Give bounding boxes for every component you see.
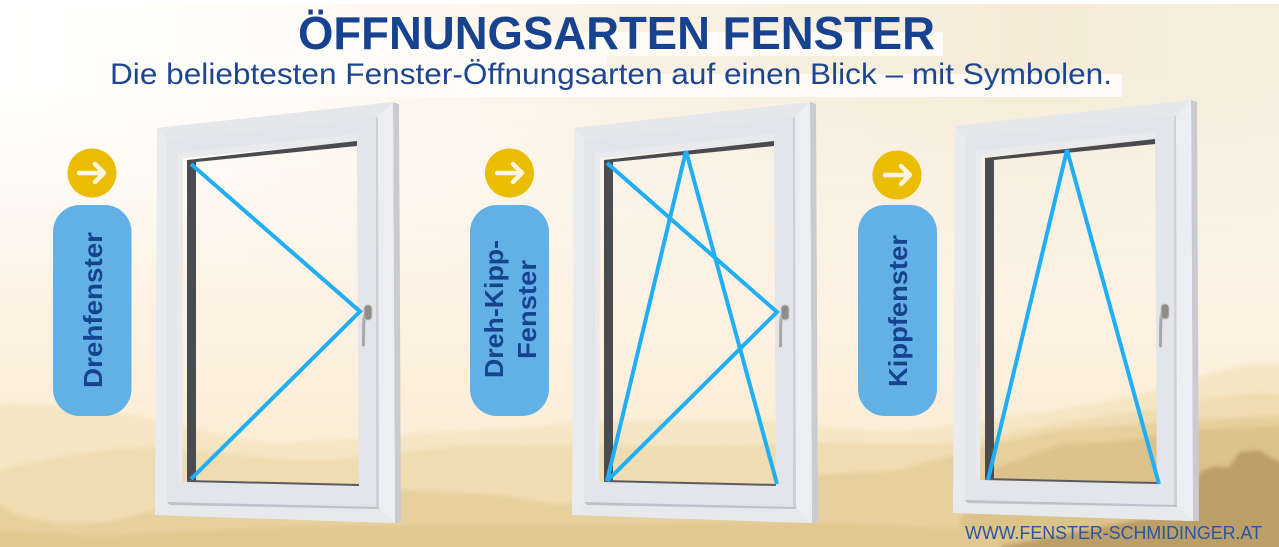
icon: window handle — [1160, 304, 1169, 346]
window photo — [572, 102, 818, 523]
panel: Dreh-Kipp-Fenster — [470, 102, 818, 523]
label pill — [470, 205, 549, 416]
label pill: Fenster — [512, 260, 542, 359]
icon: arrow badge — [68, 148, 116, 198]
panel: Drehfenster — [53, 102, 401, 523]
title: ÖFFNUNGSARTEN FENSTER — [298, 7, 935, 59]
hill layer near — [0, 415, 1279, 547]
website url: WWW.FENSTER-SCHMIDINGER.AT — [965, 523, 1262, 543]
label pill — [53, 205, 132, 416]
subtitle: Die beliebtesten Fenster-Öffnungsarten auf einen Blick – mit Symbolen. — [110, 58, 1112, 91]
label pill: Kippfenster — [883, 235, 913, 387]
ground band — [0, 522, 1000, 547]
window photo — [155, 102, 401, 523]
opening symbol lines — [988, 150, 1159, 484]
opening symbol lines — [607, 151, 777, 484]
title highlight bars — [107, 32, 1122, 97]
icon: arrow badge — [485, 148, 534, 198]
hill layer far — [0, 363, 1279, 547]
label pill: Dreh-Kipp- — [479, 240, 509, 378]
panel: Kippfenster — [858, 100, 1199, 521]
label pill — [858, 205, 937, 416]
hill layer mid — [0, 393, 1279, 547]
window photo — [953, 100, 1199, 521]
icon: window handle — [780, 305, 789, 346]
hill layer dark right — [1000, 450, 1279, 547]
opening symbol lines — [191, 164, 360, 479]
icon: window handle — [364, 305, 372, 345]
icon: arrow badge — [872, 150, 922, 200]
hill layer warm right — [960, 425, 1279, 547]
label pill: Drehfenster — [78, 232, 108, 388]
